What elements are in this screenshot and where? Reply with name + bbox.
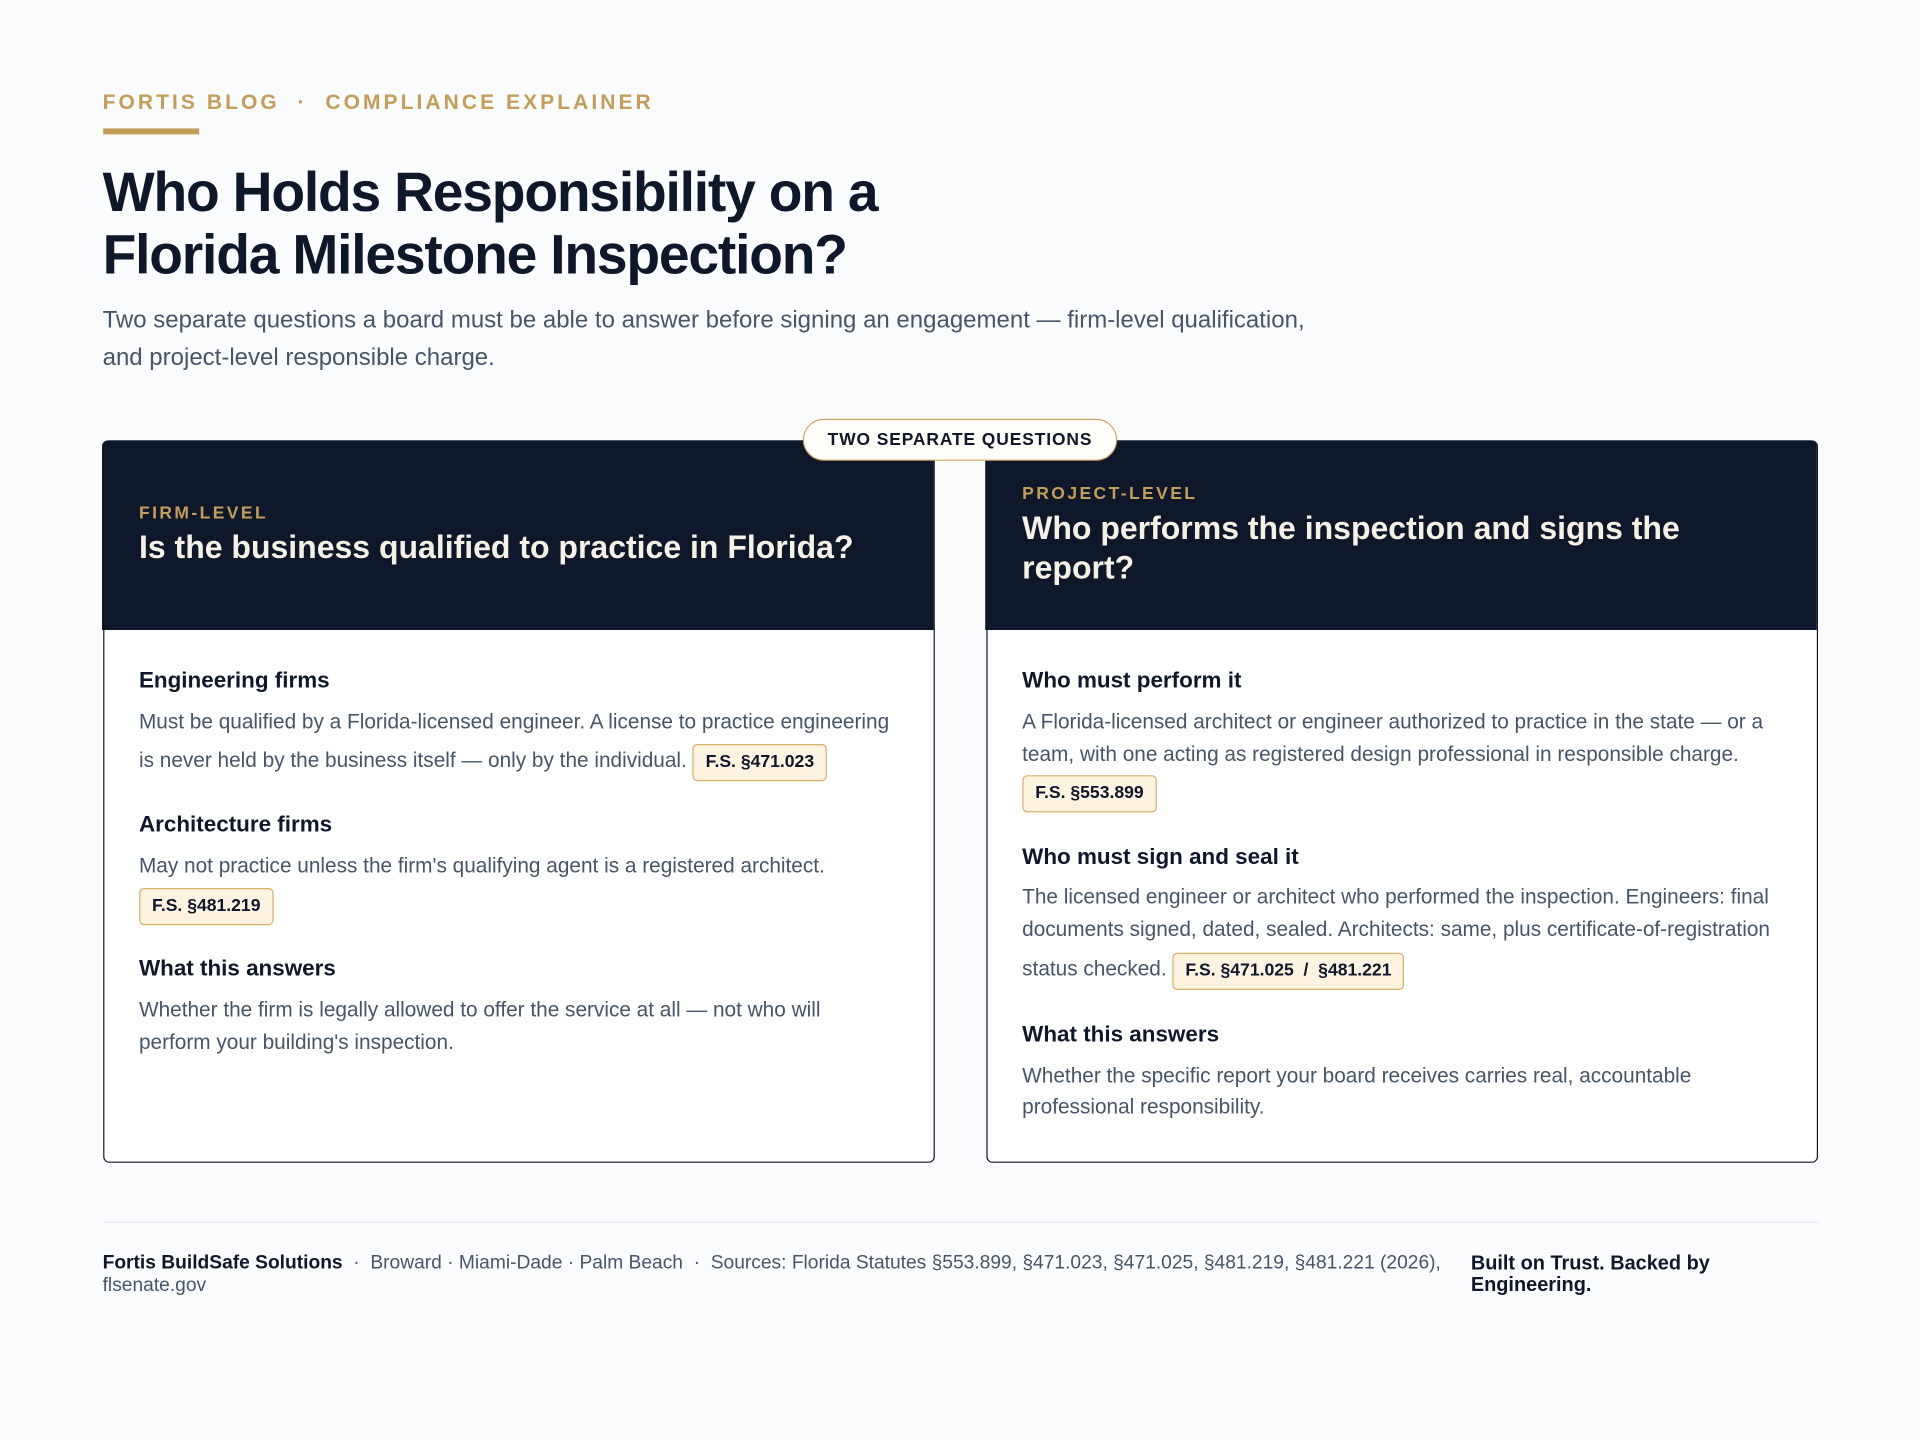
section text: May not practice unless the firm's qualifying agent is a registered architect. bbox=[139, 854, 825, 878]
footer sources: Fortis BuildSafe Solutions · Broward · Miami-Dade · Palm Beach · Sources: Florida Statutes §553.899, §471.023, §471.025, §481.219, §481.221 (2026), bbox=[103, 1253, 1441, 1274]
question: Is the business qualified to practice in Florida? bbox=[139, 529, 854, 565]
badge: two separate questions bbox=[803, 419, 1117, 461]
panel header: project-level: report? bbox=[1022, 549, 1134, 585]
question: Who performs the inspection and signs the bbox=[1022, 510, 1680, 546]
citation badge bbox=[139, 888, 274, 925]
eyebrow rule bbox=[103, 129, 199, 134]
citation badge: F.S. §481.219 bbox=[152, 896, 260, 916]
section heading: What this answers bbox=[1022, 1021, 1219, 1046]
citation badge bbox=[1173, 953, 1404, 990]
citation badge: F.S. §471.025 / §481.221 bbox=[1185, 961, 1391, 981]
section: architecture firms bbox=[139, 811, 825, 926]
section: who must perform it: team, with one acting as registered design professional in responsible charge. bbox=[1022, 741, 1739, 765]
section: who must sign and seal it: documents signed, dated, sealed. Architects: same, plus certificate-of-registration bbox=[1022, 917, 1770, 941]
citation badge bbox=[1022, 775, 1157, 812]
section text: Whether the specific report your board receives carries real, accountable bbox=[1022, 1063, 1691, 1087]
level label: FIRM-LEVEL bbox=[139, 504, 268, 524]
subtitle: Two separate questions a board must be able to answer before signing an engagement — firm-level qualification, bbox=[103, 307, 1305, 334]
section: what this answers: perform your building's inspection. bbox=[139, 1029, 454, 1053]
citation badge bbox=[693, 744, 827, 781]
section text: A Florida-licensed architect or engineer authorized to practice in the state — or a bbox=[1022, 710, 1763, 734]
subtitle: and project-level responsible charge. bbox=[103, 344, 495, 371]
section heading: Architecture firms bbox=[139, 811, 332, 836]
panel header: firm-level bbox=[102, 440, 934, 631]
footer tagline: Engineering. bbox=[1471, 1274, 1591, 1297]
footer bbox=[103, 1221, 1819, 1301]
panel: firm-level bbox=[103, 441, 934, 1163]
section: what this answers bbox=[1022, 1021, 1691, 1119]
panel: project-level bbox=[986, 441, 1817, 1163]
subtitle bbox=[103, 307, 1305, 371]
section: engineering firms bbox=[139, 667, 889, 782]
title bbox=[102, 161, 879, 286]
section text: The licensed engineer or architect who performed the inspection. Engineers: final bbox=[1022, 885, 1769, 909]
section: engineering firms: is never held by the business itself — only by the individual. bbox=[139, 747, 687, 771]
section: who must perform it bbox=[1022, 667, 1764, 812]
section text: Whether the firm is legally allowed to offer the service at all — not who will bbox=[139, 998, 820, 1022]
citation badge: F.S. §553.899 bbox=[1035, 783, 1144, 803]
section heading: Who must sign and seal it bbox=[1022, 843, 1299, 868]
level label: PROJECT-LEVEL bbox=[1022, 485, 1197, 504]
footer tagline: Built on Trust. Backed by bbox=[1471, 1251, 1710, 1274]
section heading: Who must perform it bbox=[1022, 667, 1241, 692]
section heading: What this answers bbox=[139, 955, 336, 980]
badge: two separate questions: TWO SEPARATE QUESTIONS bbox=[828, 431, 1092, 450]
title: Who Holds Responsibility on a bbox=[103, 161, 877, 223]
citation badge: F.S. §471.023 bbox=[706, 752, 814, 772]
footer tagline bbox=[1471, 1251, 1710, 1297]
footer sources bbox=[102, 1253, 1441, 1296]
section: who must sign and seal it bbox=[1022, 843, 1770, 990]
panel header: project-level bbox=[986, 440, 1817, 631]
title: Florida Milestone Inspection? bbox=[103, 224, 847, 286]
section: who must sign and seal it: status checked. bbox=[1022, 957, 1167, 981]
footer sources: flsenate.gov bbox=[103, 1275, 206, 1296]
section text: Must be qualified by a Florida-licensed engineer. A license to practice engineering bbox=[139, 710, 889, 734]
eyebrow: FORTIS BLOG · COMPLIANCE EXPLAINER bbox=[103, 90, 654, 114]
section heading: Engineering firms bbox=[139, 667, 330, 692]
section: what this answers bbox=[139, 955, 820, 1054]
section: what this answers: professional responsibility. bbox=[1022, 1095, 1264, 1119]
